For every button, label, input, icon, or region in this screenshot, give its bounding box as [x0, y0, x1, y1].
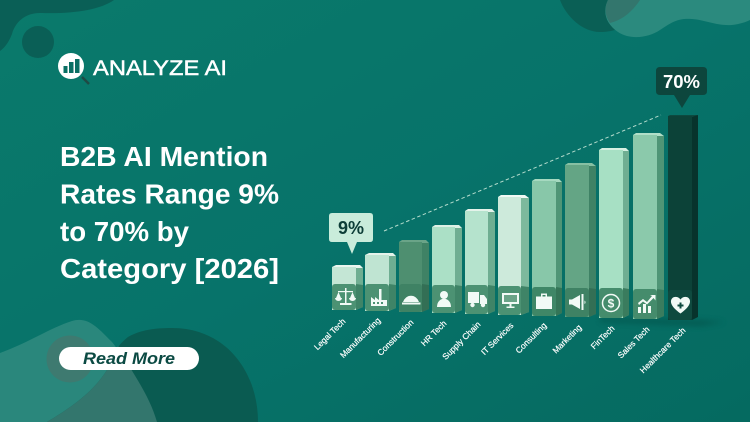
category labels: FinTech	[589, 323, 617, 351]
category labels: HR Tech	[419, 318, 449, 348]
background overlap: blob over circle	[47, 346, 157, 422]
background blob: bottom left light	[0, 320, 157, 422]
background circle: top left	[22, 26, 54, 58]
icon: heart plus	[671, 297, 690, 314]
ground shadow	[600, 318, 725, 326]
bar: IT Services	[498, 195, 529, 315]
bar: HR Tech	[432, 225, 462, 313]
title: Category [2026]	[60, 253, 279, 284]
title: to 70% by	[60, 216, 190, 247]
background blob: top right light	[605, 0, 750, 37]
title	[60, 141, 279, 284]
title: Rates Range 9%	[60, 178, 279, 210]
category labels: Sales Tech	[615, 324, 652, 360]
category labels: Healthcare Tech	[638, 325, 688, 375]
bar: Manufacturing	[365, 253, 396, 311]
background circle: bottom dark	[47, 328, 258, 422]
title: B2B AI Mention	[60, 141, 268, 172]
bar: Legal Tech	[332, 265, 363, 310]
logo wordmark: ANALYZE AI	[93, 57, 227, 80]
icon: briefcase	[536, 294, 552, 309]
bar: Consulting	[532, 179, 562, 316]
icon: hard hat	[402, 296, 420, 304]
bar: FinTech	[599, 148, 629, 318]
callout: 70%	[656, 67, 707, 108]
bar: Sales Tech	[633, 133, 664, 319]
icon: factory	[371, 289, 387, 306]
read more button: Read More	[83, 349, 175, 368]
trend line	[384, 115, 661, 231]
icon: dollar coin: $	[608, 296, 615, 310]
background overlap: top right	[606, 0, 640, 23]
callout: 9%: 9%	[338, 218, 364, 238]
bar: Marketing	[565, 163, 596, 317]
bar: Supply Chain	[465, 209, 495, 314]
background blob: top left	[0, 0, 114, 51]
read more button	[59, 347, 199, 370]
category labels: Marketing	[550, 322, 584, 355]
bar chart	[332, 115, 698, 320]
category labels: Legal Tech	[312, 316, 348, 352]
bar: Healthcare Tech	[668, 115, 698, 320]
background blob: top right dark	[560, 0, 650, 32]
icon: dollar coin	[602, 294, 620, 312]
callout: 9%	[329, 213, 373, 254]
bar: Construction	[399, 240, 429, 312]
icon: truck	[468, 292, 487, 307]
category labels	[312, 315, 688, 375]
icon: person	[437, 291, 451, 307]
icon: megaphone	[569, 294, 586, 310]
logo	[58, 53, 227, 84]
icon: growth chart	[638, 295, 656, 313]
icon: monitor	[502, 293, 519, 308]
icon: scales	[335, 288, 356, 305]
logo icon: magnifier with bars	[58, 53, 89, 84]
icons	[335, 288, 690, 314]
callout: 70%: 70%	[663, 71, 700, 92]
category labels: Supply Chain	[440, 319, 483, 362]
category labels: Manufacturing	[338, 315, 383, 360]
background circle: bottom small	[46, 336, 94, 382]
category labels: Construction	[375, 317, 416, 358]
category labels: Consulting	[513, 320, 549, 355]
category labels: IT Services	[479, 320, 515, 357]
